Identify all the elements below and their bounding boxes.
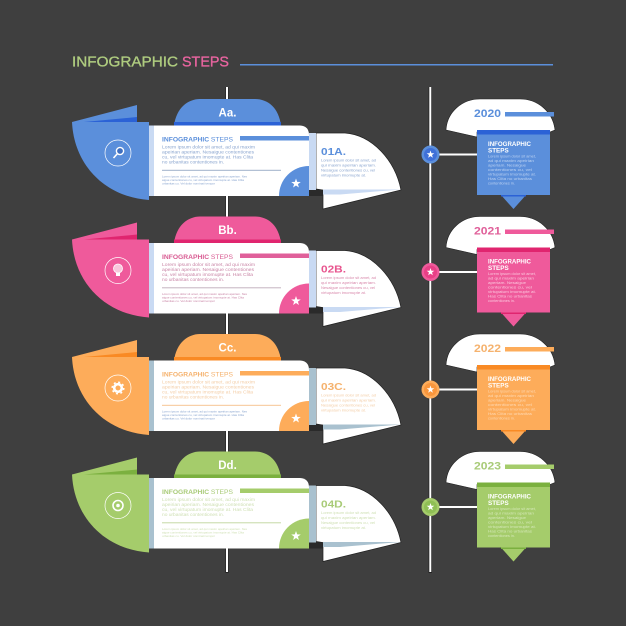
- colour card: contentiones in.: [488, 416, 515, 420]
- step card: Aa: [72, 99, 401, 209]
- colour card: [477, 130, 550, 195]
- colour card: ad qui maxim apeirian: [488, 393, 534, 398]
- step card: Bb: [72, 216, 401, 326]
- right note: Lorem ipsum dolor sit amet, ad: [321, 510, 376, 515]
- right note: virtupatum imomupte at.: [321, 525, 366, 530]
- main panel: cu, vel virtupatum imomupte at. Has Clita: [162, 507, 253, 513]
- colour card: Lorem ipsum dolor sit amet,: [488, 271, 536, 276]
- colour card: virtupatum imomupte at.: [488, 289, 536, 294]
- colour card: [477, 248, 550, 312]
- right note: Nesaigue contentiones cu, vel: [321, 402, 375, 408]
- top tab: Bb.: [218, 225, 237, 237]
- main panel: no urbanitas contentiones in.: [162, 512, 224, 518]
- right note: 01A.: [321, 146, 346, 158]
- title: STEPS: [182, 54, 229, 70]
- right note: Nesaigue contentiones cu, vel: [321, 168, 375, 172]
- pointer: [501, 430, 526, 444]
- folded flap: [72, 222, 137, 240]
- year cap: 2021: [474, 226, 501, 238]
- top tab: Dd.: [218, 460, 237, 472]
- quarter panel with icon: light bulb: [72, 240, 149, 318]
- right note: [309, 133, 401, 209]
- main panel: Lorem ipsum dolor sit amet, ad qui maxim apeirian aperiam. Nes: [162, 174, 248, 178]
- title: INFOGRAPHIC: [72, 54, 178, 70]
- connector and star node: [422, 146, 477, 164]
- year cap: 2020: [474, 108, 501, 120]
- top tab: [174, 216, 281, 244]
- colour card: INFOGRAPHIC: [488, 494, 531, 500]
- colour card: Has Clita no urbanitas: [488, 411, 532, 416]
- right note: [309, 250, 401, 326]
- top tab: [174, 99, 281, 126]
- colour card: Lorem ipsum dolor sit amet,: [488, 154, 536, 158]
- top tab: [174, 334, 281, 361]
- quarter panel with icon: target: [72, 474, 149, 552]
- colour card: INFOGRAPHIC: [488, 376, 531, 383]
- main panel: apeirian aperiam. Nesaigue contentiones: [162, 502, 255, 508]
- colour card: contentiones cu, vel: [488, 520, 532, 524]
- colour card: ad qui maxim apeirian: [488, 158, 534, 163]
- main panel: cu, vel virtupatum imomupte at. Has Clita: [162, 154, 253, 160]
- colour card: aperiam. Nesaigue: [488, 515, 526, 520]
- pointer: [501, 312, 526, 326]
- main panel: INFOGRAPHIC STEPS: [162, 489, 233, 496]
- right note: qui maxim apeirian aperiam.: [321, 162, 376, 168]
- connector and star node: [422, 380, 477, 398]
- colour card: contentiones in.: [488, 533, 515, 538]
- right note: [309, 368, 401, 444]
- main panel: INFOGRAPHIC STEPS: [162, 136, 233, 144]
- main panel: INFOGRAPHIC STEPS: [162, 372, 233, 378]
- colour card: contentiones cu, vel: [488, 284, 532, 290]
- main panel: [149, 126, 309, 196]
- top tab: Aa.: [219, 108, 236, 120]
- title: [72, 54, 229, 70]
- main panel: no urbanitas contentiones in.: [162, 277, 224, 283]
- right note: Nesaigue contentiones cu, vel: [321, 520, 375, 525]
- main panel: Lorem ipsum dolor sit amet, ad qui maxim apeirian aperiam. Nes: [162, 527, 248, 531]
- year cap: 2022: [474, 343, 501, 355]
- colour card: contentiones in.: [488, 180, 515, 186]
- main panel: aigue contentiones cu, vel virtupatum imomupte at. Has Clita: [162, 530, 245, 534]
- colour card: contentiones cu, vel: [488, 402, 532, 407]
- main panel: no urbanitas contentiones in.: [162, 394, 224, 400]
- colour card: INFOGRAPHIC: [488, 258, 531, 266]
- colour card: STEPS: [488, 265, 509, 272]
- quarter panel with icon: magnifier: [72, 122, 149, 200]
- colour card: [477, 482, 550, 548]
- pointer: [501, 195, 526, 209]
- right note: qui maxim apeirian aperiam.: [321, 515, 376, 520]
- right note: Lorem ipsum dolor sit amet, ad: [321, 158, 376, 162]
- right note: Nesaigue contentiones cu, vel: [321, 285, 375, 290]
- colour card: Lorem ipsum dolor sit amet,: [488, 388, 536, 394]
- right note: [309, 486, 401, 562]
- main panel: Lorem ipsum dolor sit amet, ad qui maxim: [162, 497, 255, 503]
- main panel: Lorem ipsum dolor sit amet, ad qui maxim: [162, 262, 255, 268]
- right note: Lorem ipsum dolor sit amet, ad: [321, 392, 376, 398]
- main panel: cu, vel virtupatum imomupte at. Has Clita: [162, 272, 253, 278]
- colour card: contentiones cu, vel: [488, 167, 532, 172]
- colour card: INFOGRAPHIC: [488, 141, 531, 148]
- main panel: apeirian aperiam. Nesaigue contentiones: [162, 267, 255, 273]
- colour card: Has Clita no urbanitas: [488, 528, 532, 534]
- top tab: Cc.: [219, 342, 236, 354]
- folded flap: [72, 340, 137, 357]
- colour card: virtupatum imomupte at.: [488, 524, 536, 529]
- main panel: aigue contentiones cu, vel virtupatum imomupte at. Has Clita: [162, 178, 245, 182]
- folded flap: [72, 458, 137, 474]
- main panel: aigue contentiones cu, vel virtupatum imomupte at. Has Clita: [162, 413, 245, 417]
- main panel: Lorem ipsum dolor sit amet, ad qui maxim: [162, 144, 255, 150]
- folded flap: [72, 105, 137, 122]
- main panel: aigue contentiones cu, vel virtupatum imomupte at. Has Clita: [162, 295, 245, 299]
- main panel: Lorem ipsum dolor sit amet, ad qui maxim: [162, 380, 255, 386]
- right note: 02B.: [321, 264, 346, 276]
- connector and star node: [422, 498, 477, 516]
- year cap: 2023: [474, 460, 501, 472]
- main panel: urbanitas cu. Vel dolor nominati tempor: [162, 416, 215, 420]
- step card: Cc: [72, 334, 401, 444]
- main panel: INFOGRAPHIC STEPS: [162, 254, 233, 261]
- main panel: [149, 243, 309, 314]
- main panel: cu, vel virtupatum imomupte at. Has Clita: [162, 390, 253, 396]
- pointer: [501, 548, 526, 562]
- right note: Lorem ipsum dolor sit amet, ad: [321, 275, 376, 280]
- right note: virtupatum imomupte at.: [321, 408, 366, 412]
- colour card: virtupatum imomupte at.: [488, 406, 536, 412]
- colour card: aperiam. Nesaigue: [488, 162, 526, 168]
- right note: 03C.: [321, 381, 346, 393]
- main panel: apeirian aperiam. Nesaigue contentiones: [162, 150, 255, 156]
- step card: Dd: [72, 452, 401, 562]
- colour card: ad qui maxim apeirian: [488, 510, 534, 516]
- right note: qui maxim apeirian aperiam.: [321, 398, 376, 402]
- main panel: apeirian aperiam. Nesaigue contentiones: [162, 384, 255, 390]
- timeline item: 2023: [422, 452, 555, 562]
- main panel: urbanitas cu. Vel dolor nominati tempor: [162, 181, 215, 185]
- main panel: [149, 360, 309, 431]
- main panel: [149, 478, 309, 548]
- colour card: [477, 365, 550, 430]
- main panel: Lorem ipsum dolor sit amet, ad qui maxim apeirian aperiam. Nes: [162, 410, 248, 414]
- colour card: Has Clita no urbanitas: [488, 294, 532, 298]
- colour card: aperiam. Nesaigue: [488, 398, 526, 402]
- colour card: STEPS: [488, 500, 509, 507]
- quarter panel with icon: gear: [72, 357, 149, 435]
- colour card: ad qui maxim apeirian: [488, 276, 534, 280]
- main panel: urbanitas cu. Vel dolor nominati tempor: [162, 534, 215, 538]
- timeline item: 2022: [422, 334, 555, 444]
- colour card: contentiones in.: [488, 298, 515, 303]
- right note: virtupatum imomupte at.: [321, 172, 366, 178]
- colour card: Lorem ipsum dolor sit amet,: [488, 506, 536, 511]
- main panel: no urbanitas contentiones in.: [162, 160, 224, 166]
- timeline item: 2021: [422, 216, 555, 326]
- colour card: STEPS: [488, 382, 509, 390]
- right note: virtupatum imomupte at.: [321, 290, 366, 295]
- top tab: [174, 452, 281, 478]
- main panel: urbanitas cu. Vel dolor nominati tempor: [162, 299, 215, 303]
- connector and star node: [422, 263, 477, 281]
- right note: qui maxim apeirian aperiam.: [321, 280, 376, 285]
- colour card: STEPS: [488, 148, 509, 154]
- timeline item: 2020: [422, 99, 555, 209]
- colour card: aperiam. Nesaigue: [488, 280, 526, 285]
- main panel: Lorem ipsum dolor sit amet, ad qui maxim apeirian aperiam. Nes: [162, 292, 248, 296]
- right note: 04D.: [321, 498, 346, 510]
- colour card: virtupatum imomupte at.: [488, 172, 536, 176]
- colour card: Has Clita no urbanitas: [488, 176, 532, 181]
